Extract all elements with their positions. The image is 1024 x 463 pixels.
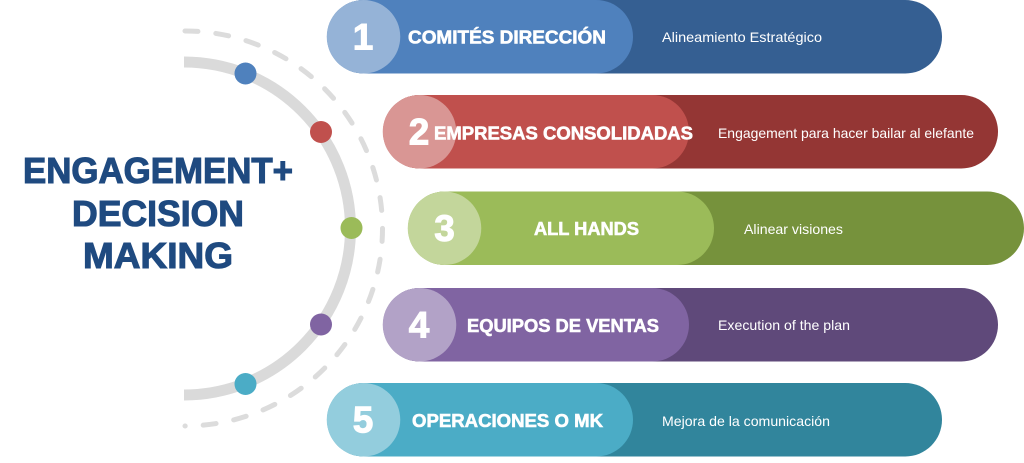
panel: step 4: Execution of the plan: [718, 317, 850, 333]
panel: step 2: [383, 95, 998, 168]
panel: step 3: Alinear visiones: [744, 221, 843, 237]
panel: step 3: ALL HANDS: [534, 218, 639, 239]
panel: step 3: 3: [434, 208, 455, 249]
panel: step 2: Engagement para hacer bailar al elefante: [718, 125, 974, 141]
title: DECISION: [72, 193, 244, 234]
title: ENGAGEMENT+: [23, 150, 293, 191]
timeline dots: [234, 62, 362, 395]
panel: step 4: EQUIPOS DE VENTAS: [467, 315, 659, 336]
title: [23, 150, 293, 276]
panel: step 1: COMITÉS DIRECCIÓN: [408, 26, 606, 48]
panel: step 3: [408, 192, 1024, 265]
panel: step 4: 4: [409, 304, 430, 346]
panel: step 1: [327, 0, 942, 74]
panel: step 4: [383, 288, 998, 362]
panel: step 5: 5: [353, 400, 373, 440]
panel: step 1: 1: [353, 16, 373, 58]
panel: step 5: Mejora de la comunicación: [662, 413, 830, 429]
panel: step 1: Alineamiento Estratégico: [662, 29, 822, 45]
panel: step 5: OPERACIONES O MK: [412, 410, 604, 431]
panel: step 2: EMPRESAS CONSOLIDADAS: [434, 122, 693, 144]
panel: step 5: [327, 383, 942, 456]
solid timeline arc: [184, 62, 350, 395]
panel: step 2: 2: [409, 112, 429, 152]
title: MAKING: [83, 235, 233, 276]
dashed outer arc: [185, 31, 382, 426]
